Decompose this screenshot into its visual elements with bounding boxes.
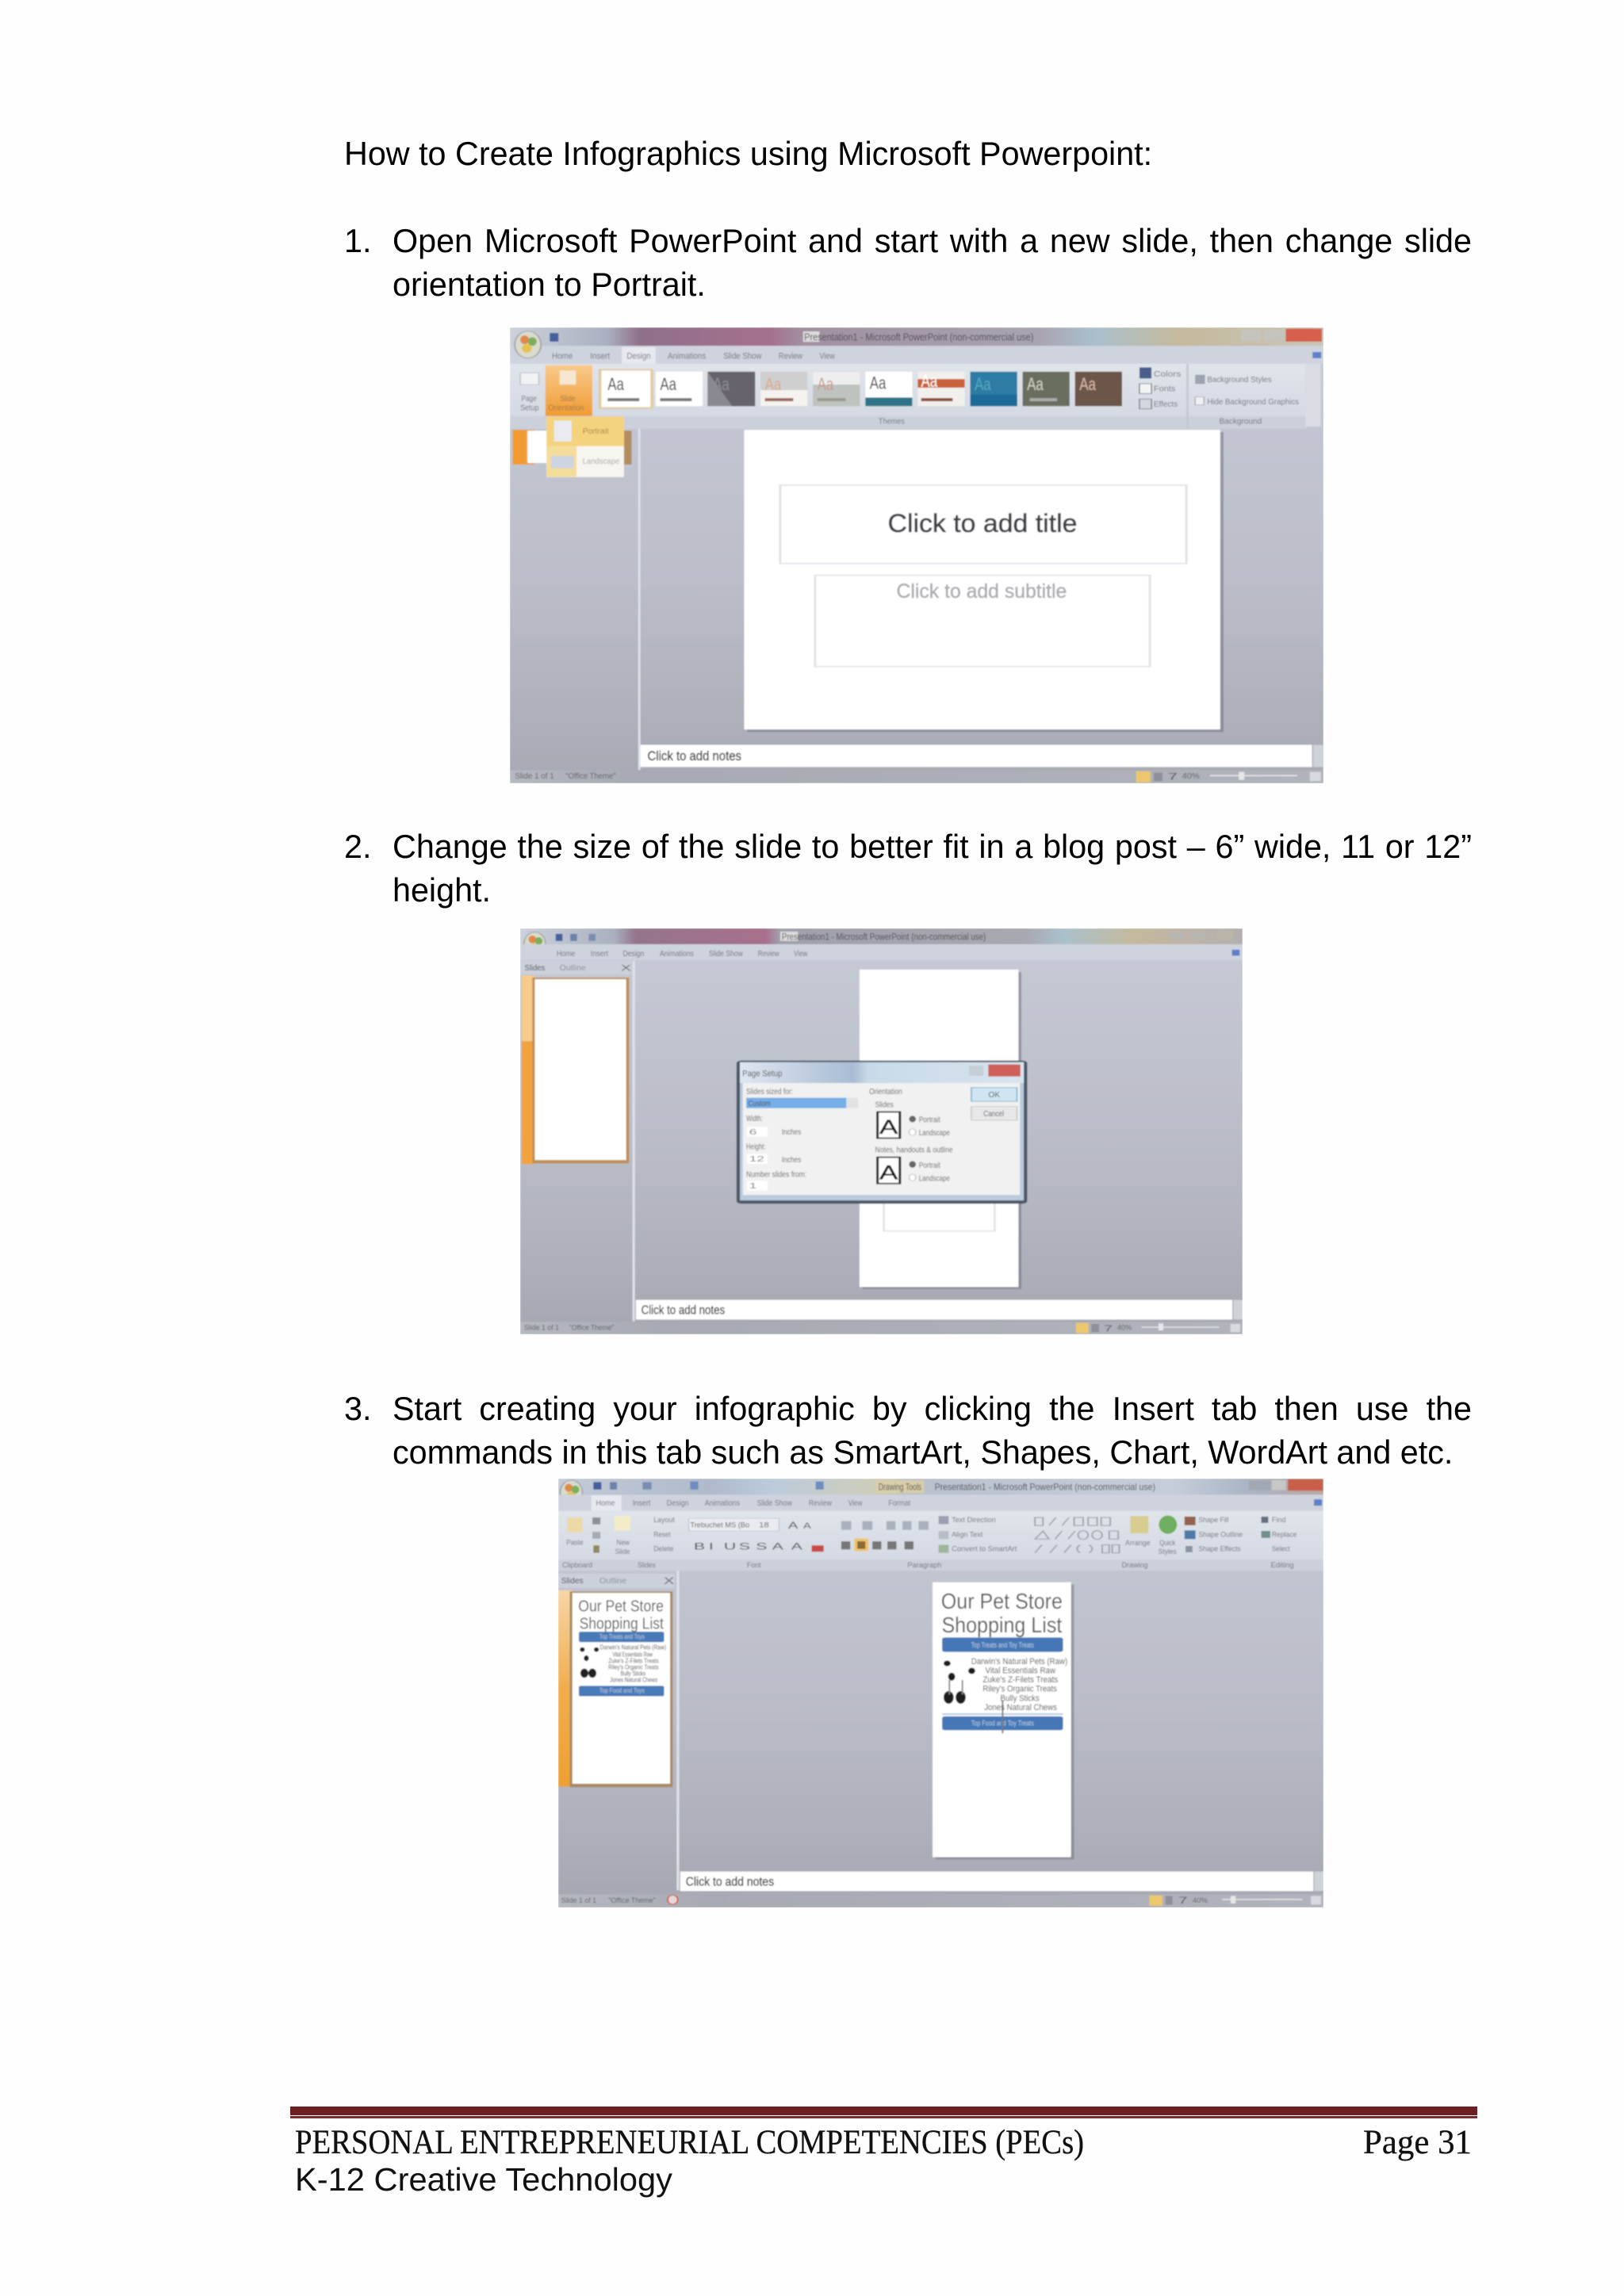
step 3 text: commands in this tab such as SmartArt, Shapes, Chart, WordArt and etc. <box>393 1434 1453 1471</box>
ribbon: A <box>791 1540 802 1552</box>
notes pane: Click to add notes <box>686 1874 774 1888</box>
theme gallery: Aa <box>1027 374 1044 394</box>
tab row: Insert <box>591 949 608 958</box>
page setup dialog: Custom <box>749 1099 771 1108</box>
slides panel with thumbnail: Top Treats and Toys <box>599 1634 645 1640</box>
tab row: Review <box>779 352 803 361</box>
status bar: Slide 1 of 1 <box>561 1896 596 1904</box>
ribbon: Styles <box>1159 1548 1177 1556</box>
slide canvas <box>744 430 1224 732</box>
slide canvas with infographic draft: Shopping List <box>941 1613 1062 1637</box>
ribbon: Trebuchet MS (Bo <box>690 1521 749 1529</box>
step 1 text: orientation to Portrait. <box>393 266 706 303</box>
status bar: 7 <box>1168 771 1178 783</box>
page setup dialog: Inches <box>782 1127 801 1136</box>
page setup dialog: 1 <box>749 1181 757 1190</box>
page setup dialog: Orientation <box>869 1087 902 1096</box>
step 3 text: 3. <box>344 1391 371 1427</box>
ribbon: Background Styles <box>1207 376 1272 385</box>
ribbon: A <box>788 1520 799 1531</box>
slide canvas with infographic draft: Our Pet Store <box>941 1590 1063 1613</box>
page setup dialog: OK <box>988 1090 1001 1099</box>
page setup dialog: A <box>879 1161 898 1184</box>
slide canvas: Click to add title <box>888 509 1077 538</box>
ribbon: I <box>709 1540 714 1552</box>
ribbon: Setup <box>520 404 538 412</box>
ribbon: Shape Fill <box>1198 1516 1228 1524</box>
page setup dialog: Landscape <box>919 1128 950 1137</box>
theme gallery <box>600 370 1122 408</box>
ribbon: Align Text <box>952 1530 983 1538</box>
ribbon: Effects <box>1154 400 1178 409</box>
tab row: Home <box>552 352 573 361</box>
ribbon: S <box>756 1540 768 1552</box>
status bar <box>510 770 1323 783</box>
ribbon: A <box>803 1521 812 1531</box>
screenshot 1: PowerPoint design tab with slide orientation menu <box>510 327 1323 783</box>
status bar <box>520 1322 1243 1334</box>
tab row: Animations <box>705 1499 740 1508</box>
page setup dialog: Inches <box>782 1155 801 1164</box>
step 1 text: 1. <box>344 223 371 259</box>
tab row: View <box>819 352 835 361</box>
ribbon: Shape Outline <box>1198 1530 1243 1538</box>
ribbon: Editing <box>1271 1560 1294 1569</box>
status bar: 40% <box>1182 772 1200 781</box>
title bar <box>510 327 1323 346</box>
page setup dialog: Landscape <box>919 1173 950 1182</box>
ribbon: Page <box>521 395 537 404</box>
title bar: Presentation1 - Microsoft PowerPoint (non-commercial use) <box>804 331 1033 343</box>
ribbon: Shape Effects <box>1198 1544 1241 1553</box>
tab row: Home <box>557 949 575 958</box>
status bar: Slide 1 of 1 <box>524 1323 559 1332</box>
footer text: K-12 Creative Technology <box>295 2161 672 2198</box>
step 3 text <box>344 1391 1472 1471</box>
status bar: 40% <box>1193 1896 1208 1904</box>
tab row: Slide Show <box>723 352 762 361</box>
theme gallery: Aa <box>607 374 624 394</box>
ribbon: Arrange <box>1125 1539 1151 1547</box>
page setup dialog: Slides <box>875 1100 894 1108</box>
screenshot 2: PowerPoint page setup dialog <box>520 928 1243 1334</box>
step 2 text: 2. <box>344 828 371 865</box>
ribbon: Paragraph <box>907 1560 941 1569</box>
office button <box>515 331 541 358</box>
notes pane: Click to add notes <box>648 748 741 763</box>
theme gallery: Aa <box>870 373 887 392</box>
slides panel with thumbnail: Jones Natural Chews <box>610 1676 657 1683</box>
ribbon: Quick <box>1159 1539 1175 1547</box>
slide canvas: Click to add subtitle <box>897 580 1067 603</box>
slide canvas with infographic draft: Darwin's Natural Pets (Raw) <box>971 1657 1067 1667</box>
step 1 text: Open Microsoft PowerPoint and start with a new slide, then change slide <box>393 223 1472 259</box>
page setup dialog: 6 <box>749 1127 757 1136</box>
page setup dialog: Height: <box>746 1142 766 1150</box>
ribbon: Convert to SmartArt <box>952 1544 1017 1553</box>
ribbon: Delete <box>653 1544 674 1553</box>
notes pane <box>641 745 1324 767</box>
slides panel with thumbnail: X <box>664 1576 674 1586</box>
slide canvas with infographic draft: Zuke's Z-Filets Treats <box>982 1675 1058 1685</box>
ribbon: A <box>772 1540 783 1552</box>
office button <box>561 1480 582 1505</box>
slides panel with thumbnail: Top Food and Toys <box>599 1688 645 1694</box>
ribbon: Slide <box>615 1548 630 1556</box>
theme gallery: Aa <box>818 374 834 394</box>
tab row: Animations <box>668 352 706 361</box>
notes pane <box>636 1300 1243 1319</box>
theme gallery: Aa <box>1079 374 1096 394</box>
page setup dialog: A <box>879 1116 898 1138</box>
step 1 text <box>344 223 1472 303</box>
slide canvas with infographic draft: Top Treats and Toy Treats <box>971 1640 1034 1649</box>
tab row <box>520 944 1243 960</box>
page setup dialog: Cancel <box>983 1109 1004 1118</box>
ribbon <box>558 1511 1323 1571</box>
tab row: Design <box>626 352 651 361</box>
status bar: "Office Theme" <box>608 1896 656 1904</box>
ribbon: Orientation <box>548 404 584 412</box>
tab row: Animations <box>660 949 694 958</box>
page setup dialog: Width: <box>746 1114 763 1123</box>
status bar: 7 <box>1104 1324 1113 1334</box>
slide canvas <box>860 970 1021 1289</box>
theme gallery: Aa <box>921 371 938 391</box>
ribbon: B <box>694 1540 705 1552</box>
status bar: 40% <box>1117 1323 1132 1332</box>
ribbon <box>510 364 1321 429</box>
theme gallery: Aa <box>975 374 991 394</box>
tab row: Home <box>596 1499 615 1508</box>
slide orientation dropdown <box>546 416 624 477</box>
ribbon: Clipboard <box>562 1560 592 1569</box>
slides panel: Outline <box>560 963 586 972</box>
tab row: Format <box>888 1499 910 1508</box>
ribbon: Background <box>1219 417 1262 427</box>
screenshot 3: PowerPoint home tab with pet store infographic <box>558 1479 1323 1908</box>
title bar: Drawing Tools <box>879 1483 921 1492</box>
footer <box>290 2107 1477 2198</box>
slide canvas with infographic draft: Riley's Organic Treats <box>982 1685 1057 1693</box>
title bar <box>558 1479 1323 1494</box>
slide canvas with infographic draft: Top Food and Toy Treats <box>971 1719 1034 1728</box>
title bar: Presentation1 - Microsoft PowerPoint (non-commercial use) <box>782 932 986 942</box>
footer rule <box>290 2107 1477 2118</box>
tab row: Review <box>758 949 779 958</box>
ribbon: S <box>739 1540 750 1552</box>
ribbon: Colors <box>1154 370 1181 379</box>
heading: How to Create Infographics using Microsoft Powerpoint: <box>344 136 1152 172</box>
slides panel with thumbnail: Darwin's Natural Pets (Raw) <box>600 1644 666 1651</box>
ribbon: Layout <box>653 1516 675 1524</box>
ribbon: Find <box>1272 1516 1286 1524</box>
slides panel: X <box>621 964 631 974</box>
page setup dialog: Number slides from: <box>746 1170 806 1179</box>
tab row: Design <box>622 949 644 958</box>
step 3 text: Start creating your infographic by clicking the Insert tab then use the <box>393 1391 1472 1427</box>
page setup dialog: Portrait <box>919 1115 940 1124</box>
ribbon: Slides <box>638 1560 656 1569</box>
ribbon: Reset <box>653 1530 671 1538</box>
page setup dialog: Slides sized for: <box>746 1087 793 1096</box>
status bar <box>558 1894 1323 1908</box>
ribbon: Font <box>747 1560 761 1569</box>
slides panel with thumbnail <box>558 1571 680 1890</box>
slide canvas with infographic draft: Bully Sticks <box>1000 1693 1040 1703</box>
step 2 text: height. <box>393 872 491 909</box>
status bar: "Office Theme" <box>565 772 616 781</box>
tab row: View <box>794 949 808 958</box>
ribbon: Select <box>1272 1544 1290 1553</box>
ribbon: Drawing <box>1122 1560 1148 1569</box>
slide canvas with infographic draft: Vital Essentials Raw <box>986 1666 1056 1675</box>
tab row: Insert <box>590 352 610 361</box>
ribbon: Paste <box>566 1538 584 1547</box>
ribbon: Replace <box>1272 1530 1297 1538</box>
theme gallery: Aa <box>765 374 782 394</box>
slides panel with thumbnail: Vital Essentials Raw <box>612 1651 653 1658</box>
slides panel: Slides <box>525 963 545 972</box>
slides panel <box>520 961 635 1321</box>
notes pane: Click to add notes <box>642 1303 725 1317</box>
ribbon: Fonts <box>1154 385 1175 393</box>
tab row: Insert <box>633 1499 650 1508</box>
slide thumbnail panel <box>512 429 641 770</box>
notes pane <box>680 1872 1323 1891</box>
page setup dialog <box>737 1061 1027 1203</box>
status bar: "Office Theme" <box>569 1323 615 1332</box>
ribbon: Text Direction <box>952 1516 996 1524</box>
slides panel with thumbnail: Outline <box>599 1577 626 1586</box>
slide canvas with infographic draft <box>933 1582 1074 1859</box>
slides panel with thumbnail: Riley's Organic Treats <box>608 1663 659 1670</box>
slides panel with thumbnail: Our Pet Store <box>578 1598 664 1616</box>
tab row <box>510 346 1323 364</box>
status bar: Slide 1 of 1 <box>515 772 554 781</box>
page setup dialog: Page Setup <box>742 1070 783 1079</box>
status bar: 7 <box>1178 1896 1187 1906</box>
footer text <box>295 2129 1472 2198</box>
theme gallery: Aa <box>660 374 677 394</box>
ribbon: Themes <box>879 417 905 427</box>
slides panel with thumbnail: Zuke's Z-Filets Treats <box>608 1657 659 1664</box>
slides panel with thumbnail: Slides <box>561 1577 584 1586</box>
theme gallery: Aa <box>713 374 730 394</box>
tab row: View <box>848 1499 863 1508</box>
tab row <box>558 1494 1323 1511</box>
tab row: Slide Show <box>757 1499 792 1508</box>
tab row: Slide Show <box>709 949 743 958</box>
step 2 text: Change the size of the slide to better fit in a blog post – 6” wide, 11 or 12” <box>393 828 1472 865</box>
slide canvas with infographic draft: Jones Natural Chews <box>984 1703 1057 1712</box>
page setup dialog: 12 <box>749 1154 764 1163</box>
slide orientation dropdown: Landscape <box>583 457 619 466</box>
office button and quick access <box>524 932 596 955</box>
slides panel with thumbnail: Shopping List <box>580 1615 664 1632</box>
ribbon: U <box>724 1540 736 1552</box>
ribbon: 18 <box>759 1521 769 1529</box>
slide orientation dropdown: Portrait <box>583 427 609 436</box>
title bar <box>520 928 1243 944</box>
step 2 text <box>344 828 1472 909</box>
page setup dialog: Notes, handouts & outline <box>875 1146 953 1154</box>
ribbon: Slide <box>560 395 576 404</box>
slides panel with thumbnail: Bully Sticks <box>620 1670 645 1677</box>
ribbon: New <box>616 1538 630 1547</box>
tab row: Review <box>809 1499 832 1508</box>
page setup dialog: Portrait <box>919 1161 940 1169</box>
tab row: Design <box>667 1499 689 1508</box>
